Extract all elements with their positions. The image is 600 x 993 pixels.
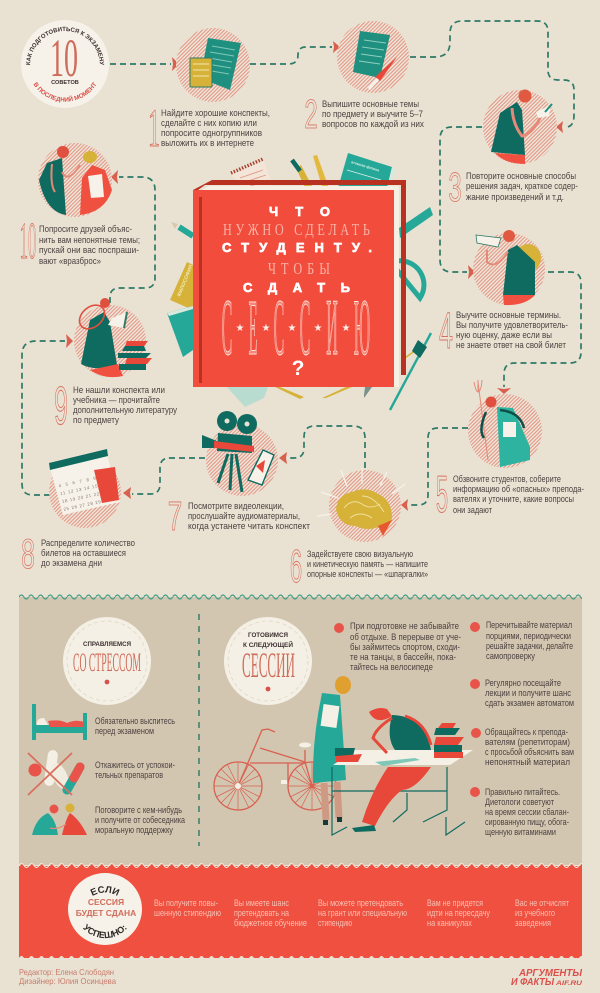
text 7: когда устанете читать конспект [188, 521, 310, 531]
benefit 5: Вас не отчислят [515, 898, 569, 908]
panel: lower section [19, 593, 582, 865]
step 6 [290, 468, 428, 592]
text 2 [322, 99, 424, 129]
icon: brain [317, 468, 405, 542]
text 4: Вы получите удовлетворитель- [456, 320, 568, 330]
tip: nutrition: сированную пищу, обога- [485, 817, 569, 827]
text 9: Не нашли конспекта или [73, 385, 165, 395]
step 3 [448, 90, 578, 211]
tall word: ★ [236, 323, 245, 334]
book headline: ЧТОБЫ [268, 260, 330, 279]
text: talk [95, 805, 185, 835]
text 10 [39, 224, 140, 266]
text 1: попросите одногруппников [161, 128, 262, 138]
route arrows [66, 41, 563, 511]
benefit 1: Вы получите повы- [154, 898, 218, 908]
benefit 2: претендовать на [234, 908, 289, 918]
badge: if passed: УСПЕШНО: [83, 924, 127, 938]
number 9: 9 [54, 375, 68, 436]
protractor [397, 261, 424, 298]
tall word: И [326, 285, 338, 372]
teal book: атомная физика [351, 160, 380, 173]
pages [203, 186, 399, 387]
tip: tutors: вателям (репетиторам) [485, 737, 570, 747]
tall word: ★ [288, 323, 297, 334]
text 5: вателях и уточните, какие вопросы [453, 494, 574, 504]
pencil [313, 155, 329, 190]
tip: tutors: Обращайтесь к препода- [485, 727, 568, 737]
benefit 3: Вы можете претендовать [318, 898, 403, 908]
next session badge: ГОТОВИМСЯ [248, 633, 288, 639]
number 10: 10 [20, 214, 36, 270]
text 8: билетов на оставшиеся [41, 548, 126, 558]
benefit 5: заведения [515, 918, 551, 928]
text 1 [161, 108, 270, 148]
icon: notes [176, 28, 250, 102]
book headline: ЧТО [269, 204, 330, 219]
text 5 [453, 474, 584, 515]
icon: bed [32, 704, 87, 740]
panel: stress [28, 617, 185, 835]
benefit 1 [154, 898, 221, 918]
badge number: 10 [50, 28, 78, 88]
credits [19, 967, 116, 986]
benefit 1: шенную стипендию [154, 908, 221, 918]
text 10: Попросите друзей объяс- [39, 224, 132, 234]
ruler [399, 207, 433, 238]
icon: calendar [49, 449, 121, 528]
text 4: Выучите основные термины. [456, 310, 561, 320]
text: sleep [95, 716, 175, 736]
icon: talking people [32, 804, 87, 835]
tall word: С [274, 285, 284, 372]
number 2: 2 [304, 93, 318, 138]
badge: if passed: ЕСЛИ [90, 886, 120, 896]
text 7 [188, 501, 310, 531]
yellow book [170, 262, 195, 310]
text 6: и кинетическую память — напишите [307, 559, 428, 569]
badge: if passed: БУДЕТ СДАНА [76, 908, 136, 918]
text 1: выложить их в интернете [161, 138, 254, 148]
text: pills [95, 760, 175, 780]
yellow book: ФИЛОСОФИЯ [176, 264, 195, 298]
bottom book [227, 387, 268, 407]
number 7: 7 [168, 494, 182, 540]
tall word: ★ [342, 323, 351, 334]
benefit 4: идти на пересдачу [427, 908, 490, 918]
text 7: Посмотрите видеолекции, [188, 501, 284, 511]
bullets and text [334, 621, 461, 672]
badge: if passed: СЕССИЯ [88, 897, 124, 907]
text 3 [466, 171, 578, 202]
route: dashed connectors [22, 21, 581, 505]
badge bottom arc text: В ПОСЛЕДНИЙ МОМЕНТ [34, 82, 96, 103]
panel: next session: СЕССИИ [242, 645, 295, 685]
text: sleep: Обязательно выспитесь [95, 716, 175, 726]
next session badge [224, 617, 312, 705]
step 5 [436, 380, 584, 524]
text 5: Обзвоните студентов, соберите [453, 474, 561, 484]
icon: devil teacher [468, 380, 542, 468]
text 4: не знаете ответ на свой билет [456, 340, 566, 350]
badge: 10 tips [21, 20, 109, 108]
text 9: по предмету [73, 415, 119, 425]
tall word: С [300, 285, 310, 372]
tip: attend: лекции и получите шанс [485, 688, 571, 698]
study objects around book [167, 153, 433, 410]
text 8 [41, 538, 135, 568]
tall word: Е [249, 284, 257, 372]
text: talk: моральную поддержку [95, 825, 173, 835]
pen tip [292, 160, 300, 171]
tip: reread [470, 620, 573, 661]
text 5: они задают [453, 505, 492, 515]
text 8: до экзамена дни [41, 558, 102, 568]
logo [511, 968, 583, 988]
icon: notebook and pen [337, 21, 409, 93]
tall word: Ю [354, 285, 370, 372]
tip: nutrition: Правильно питайтесь. [485, 787, 560, 797]
badge top arc text: КАК ПОДГОТОВИТЬСЯ К ЭКЗАМЕНУ [26, 26, 104, 65]
icon: calendar: 18 19 20 21 22 [61, 491, 100, 504]
teal book [338, 153, 396, 188]
text: sleep: перед экзаменом [95, 726, 154, 736]
number 8: 8 [21, 531, 35, 578]
text 2: по предмету и выучите 5–7 [322, 109, 423, 119]
benefit 4: на каникулах [427, 918, 472, 928]
stress badge: СПРАВЛЯЕМСЯ [83, 642, 131, 648]
bottom pencil [275, 387, 304, 399]
text 9 [73, 385, 177, 425]
bullets and text: тайтесь на велосипеде [350, 662, 433, 672]
tip: attend [470, 678, 574, 708]
step 8 [21, 449, 135, 578]
icon: calendar: 4 5 6 7 8 9 [58, 475, 97, 488]
panel: if passed band [19, 863, 582, 958]
bullets and text: бы займитесь спортом, сходи- [350, 642, 460, 652]
bottom tool [364, 387, 372, 398]
benefit 3: стипендию [318, 918, 352, 928]
text: pills: тельных препаратов [95, 770, 163, 780]
icon: crossed pills [28, 749, 80, 795]
tip: reread: Перечитывайте материал [486, 620, 572, 630]
step 7 [168, 411, 310, 540]
icon: student with card [473, 230, 545, 305]
text 3: решения задач, краткое содер- [466, 181, 578, 191]
benefit 5 [515, 898, 569, 928]
credits: Редактор: Елена Слободян [19, 967, 114, 977]
illustration: table with books [332, 723, 473, 835]
text: pills: Откажитесь от успокои- [95, 760, 175, 770]
benefit 4 [427, 898, 490, 928]
stress badge [63, 617, 151, 705]
tip: attend: Регулярно посещайте [485, 678, 561, 688]
text 9: дополнительную литературу [73, 405, 177, 415]
tip: nutrition: щенную витаминами [485, 827, 556, 837]
text 3: жание произведений и т.д. [466, 192, 564, 202]
notepad [231, 159, 273, 192]
number 5: 5 [436, 466, 448, 524]
text 8: Распределите количество [41, 538, 135, 548]
text 4 [456, 310, 568, 350]
benefit 2: Вы имеете шанс [234, 898, 289, 908]
tall word [222, 284, 370, 372]
number 3: 3 [448, 166, 462, 211]
badge: if passed [68, 873, 142, 945]
number 1: 1 [148, 99, 160, 159]
step 4 [439, 230, 568, 359]
central book [193, 180, 406, 387]
benefit 2 [234, 898, 307, 928]
teal book left [167, 306, 193, 357]
tip: reread: самопроверку [486, 651, 535, 661]
step 1 [148, 28, 270, 159]
text 7: прослушайте аудиоматериалы, [188, 511, 300, 521]
text 10: вают «вразброс» [39, 256, 101, 266]
text 1: Найдите хорошие конспекты, [161, 108, 270, 118]
panel: next session [214, 617, 574, 837]
text 6: Задействуете свою визуальную [307, 549, 413, 559]
benefit 4: Вам не придется [427, 898, 483, 908]
credits: Дизайнер: Юлия Осинцева [19, 976, 116, 986]
illustration: woman [313, 676, 351, 825]
icon: film camera and phone [202, 411, 278, 496]
logo: И ФАКТЫ [511, 977, 555, 988]
icon: reading student [483, 90, 557, 164]
panel: stress: СО СТРЕССОМ [73, 648, 141, 677]
number 4: 4 [439, 304, 453, 359]
bottom pen [322, 387, 352, 398]
tip: nutrition [470, 787, 569, 837]
book headline: СТУДЕНТУ. [222, 240, 372, 255]
badge label: СОВЕТОВ [51, 80, 79, 86]
bullets and text: те на танцы, в бассейн, пока- [350, 652, 456, 662]
benefit 3 [318, 898, 407, 928]
book headline: НУЖНО СДЕЛАТЬ [223, 221, 370, 240]
book headline [222, 204, 372, 295]
front cover [193, 190, 394, 387]
tip: nutrition: Диетологи советуют [485, 797, 554, 807]
book headline: СДАТЬ [243, 280, 350, 295]
icon: calendar: 25 26 27 28 29 [63, 499, 102, 512]
benefit 5: из учебного [515, 908, 555, 918]
step 2 [304, 21, 424, 138]
illustration: writing man [352, 708, 431, 832]
text 2: Выпишите основные темы [322, 99, 419, 109]
text 3: Повторите основные способы [466, 171, 576, 181]
tall word: ★ [314, 323, 323, 334]
left pencil [171, 222, 193, 236]
text 6 [307, 549, 428, 579]
icon: two friends talking [38, 143, 112, 217]
compass [390, 333, 431, 410]
benefit 3: на грант или специальную [318, 908, 407, 918]
text 4: ную оценку, даже если вы [456, 330, 552, 340]
icon: calendar: 11 12 13 14 15 [60, 483, 98, 496]
logo: АРГУМЕНТЫ [518, 968, 583, 979]
tip: tutors [471, 727, 574, 767]
text 9: учебника — прочитайте [73, 395, 160, 405]
text 6: опорные конспекты — «шпаргалки» [307, 569, 428, 579]
pen [296, 165, 313, 190]
text 10: пускай они вас поспраши- [39, 245, 139, 255]
icon: reader with books [74, 298, 152, 377]
text 10: нить вам непонятные темы; [39, 235, 140, 245]
bullets and text: об отдыхе. В перерыве от уче- [350, 632, 461, 642]
tip: attend: сдать экзамен автоматом [485, 698, 574, 708]
spine strip [199, 197, 202, 383]
logo: AIF.RU [555, 980, 582, 987]
tip: tutors: с просьбой объяснить вам [485, 747, 574, 757]
tip: tutors: непонятный материал [485, 757, 570, 767]
illustration: bicycle [214, 729, 336, 810]
text: talk: и получите от собеседника [95, 815, 185, 825]
bullets and text: При подготовке не забывайте [350, 621, 459, 631]
number 6: 6 [290, 540, 302, 592]
text 2: вопросов по каждой из них [322, 119, 424, 129]
tip: reread: порциями, периодически [486, 631, 571, 641]
tip: reread: решайте задачки, делайте [486, 641, 573, 651]
step 9 [54, 298, 177, 436]
next session badge: К СЛЕДУЮЩЕЙ [243, 641, 293, 649]
text: talk: Поговорите с кем-нибудь [95, 805, 182, 815]
text 1: сделайте с них копию или [161, 118, 257, 128]
back cover [193, 180, 406, 375]
step 10 [20, 143, 140, 270]
benefit 2: бюджетное обучение [234, 918, 307, 928]
tall word: ★ [262, 323, 271, 334]
tall word: С [222, 285, 232, 372]
tip: nutrition: на время сессии сбалан- [485, 807, 569, 817]
question mark: ? [292, 357, 304, 380]
